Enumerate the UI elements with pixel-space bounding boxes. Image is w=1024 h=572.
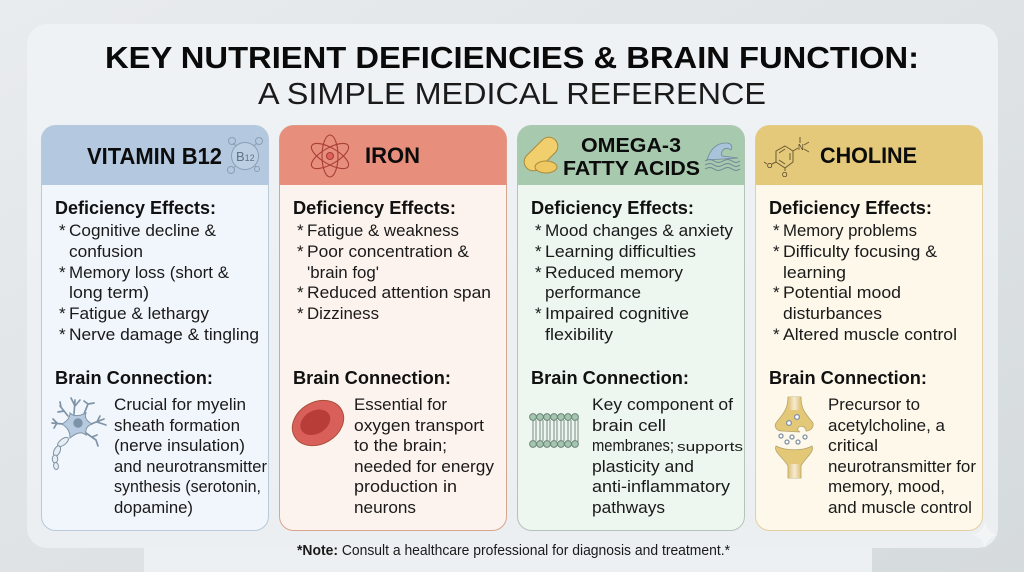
deficiency effects list: * <box>297 221 304 240</box>
title: A SIMPLE MEDICAL REFERENCE <box>258 76 766 111</box>
deficiency effects heading: Deficiency Effects: <box>769 198 932 218</box>
brain connection text: sheath formation <box>114 416 240 435</box>
heading: vitamin B12: VITAMIN B12 <box>87 143 222 169</box>
deficiency effects list: Learning difficulties <box>545 242 696 261</box>
deficiency effects list: * <box>297 283 304 302</box>
panel: choline <box>756 126 982 530</box>
brain connection text: synthesis (serotonin, <box>114 477 261 496</box>
brain connection text: membranes; <box>592 436 674 455</box>
icon: synapse <box>775 397 813 478</box>
brain connection text: neurons <box>354 498 416 517</box>
deficiency effects heading: Deficiency Effects: <box>293 198 456 218</box>
deficiency effects list: Reduced memory <box>545 263 684 282</box>
deficiency effects list: Nerve damage & tingling <box>69 325 259 344</box>
brain connection text: anti-inflammatory <box>592 477 731 496</box>
heading: omega-3 fatty acids <box>563 134 700 180</box>
icon: B12 molecule <box>228 138 262 174</box>
brain connection heading: Brain Connection: <box>769 368 927 388</box>
panel: vitamin B12 <box>42 126 268 530</box>
deficiency effects list: flexibility <box>545 325 614 344</box>
deficiency effects list: Reduced attention span <box>307 283 491 302</box>
brain connection text: neurotransmitter for <box>828 457 976 476</box>
sparkle mark <box>972 521 998 549</box>
panel: omega-3 <box>518 126 744 530</box>
deficiency effects list <box>59 221 259 344</box>
deficiency effects list: Poor concentration & <box>307 242 470 261</box>
note strip background <box>144 546 872 572</box>
deficiency effects list: performance <box>545 283 641 302</box>
brain connection text <box>592 395 743 517</box>
deficiency effects list: Mood changes & anxiety <box>545 221 734 240</box>
brain connection text: plasticity and <box>592 457 694 476</box>
title <box>105 40 919 111</box>
brain connection text: production in <box>354 477 457 496</box>
deficiency effects list: Memory loss (short & <box>69 263 230 282</box>
brain connection text <box>354 395 494 517</box>
icon: choline molecule <box>764 137 809 179</box>
deficiency effects list: Cognitive decline & <box>69 221 217 240</box>
deficiency effects list: * <box>59 304 66 323</box>
icon: red blood cell <box>284 391 352 455</box>
icon: choline molecule: O <box>767 163 773 170</box>
deficiency effects list: * <box>535 263 542 282</box>
brain connection text: memory, mood, <box>828 477 945 496</box>
icon: B12 molecule: B12 <box>236 149 255 164</box>
brain connection text: needed for energy <box>354 457 494 476</box>
icon: neuron <box>52 398 106 470</box>
icon: choline molecule: N <box>798 143 804 152</box>
deficiency effects list: disturbances <box>783 304 882 323</box>
deficiency effects list: 'brain fog' <box>307 263 379 282</box>
deficiency effects list <box>773 221 957 344</box>
deficiency effects list: * <box>773 242 780 261</box>
heading: iron: IRON <box>365 143 420 168</box>
brain connection text: and neurotransmitter <box>114 457 267 476</box>
icon: fish oil capsules <box>520 133 562 175</box>
title: KEY NUTRIENT DEFICIENCIES & BRAIN FUNCTION: <box>105 40 919 75</box>
deficiency effects list: * <box>773 325 780 344</box>
brain connection heading: Brain Connection: <box>293 368 451 388</box>
brain connection text: Key component of <box>592 395 733 414</box>
deficiency effects list: Fatigue & lethargy <box>69 304 210 323</box>
brain connection text: Precursor to <box>828 395 920 414</box>
brain connection text: supports <box>677 440 743 454</box>
icon: iron atom <box>308 135 352 177</box>
icon: cell membrane bilayer <box>530 414 578 447</box>
brain connection text: critical <box>828 436 878 455</box>
footer note: *Note: Consult a healthcare professional for diagnosis and treatment.* <box>297 543 730 559</box>
deficiency effects heading: Deficiency Effects: <box>55 198 216 218</box>
deficiency effects list: * <box>773 221 780 240</box>
heading: omega-3 fatty acids: FATTY ACIDS <box>563 157 700 180</box>
heading: choline: CHOLINE <box>820 143 917 168</box>
deficiency effects list: * <box>773 283 780 302</box>
deficiency effects list <box>535 221 734 344</box>
deficiency effects list: confusion <box>69 242 143 261</box>
deficiency effects list: Dizziness <box>307 304 379 323</box>
deficiency effects list <box>297 221 491 323</box>
deficiency effects list: Impaired cognitive <box>545 304 689 323</box>
deficiency effects list: Altered muscle control <box>783 325 957 344</box>
brain connection text: pathways <box>592 498 665 517</box>
brain connection text: to the brain; <box>354 436 447 455</box>
brain connection text: dopamine) <box>114 498 193 517</box>
heading: omega-3 fatty acids: OMEGA-3 <box>581 134 681 157</box>
brain connection heading: Brain Connection: <box>531 368 689 388</box>
deficiency effects list: Memory problems <box>783 221 917 240</box>
deficiency effects list: * <box>59 221 66 240</box>
brain connection text: (nerve insulation) <box>114 436 245 455</box>
brain connection text: oxygen transport <box>354 416 484 435</box>
brain connection text: and muscle control <box>828 498 972 517</box>
deficiency effects list: long term) <box>69 283 149 302</box>
deficiency effects list: * <box>297 304 304 323</box>
brain connection heading: Brain Connection: <box>55 368 213 388</box>
deficiency effects list: learning <box>783 263 846 282</box>
deficiency effects list: * <box>59 325 66 344</box>
deficiency effects list: * <box>59 263 66 282</box>
deficiency effects list: * <box>535 221 542 240</box>
icon: wave <box>705 143 740 170</box>
icon: choline molecule: O <box>782 172 788 179</box>
brain connection text: Essential for <box>354 395 447 414</box>
deficiency effects list: * <box>535 242 542 261</box>
brain connection text <box>828 395 976 517</box>
deficiency effects list: * <box>297 242 304 261</box>
brain connection text: acetylcholine, a <box>828 416 946 435</box>
brain connection text <box>114 395 267 517</box>
brain connection text: brain cell <box>592 416 666 435</box>
deficiency effects list: Fatigue & weakness <box>307 221 459 240</box>
deficiency effects list: Difficulty focusing & <box>783 242 938 261</box>
panel: iron <box>280 126 506 530</box>
deficiency effects heading: Deficiency Effects: <box>531 198 694 218</box>
deficiency effects list: * <box>535 304 542 323</box>
deficiency effects list: Potential mood <box>783 283 901 302</box>
brain connection text: Crucial for myelin <box>114 395 246 414</box>
